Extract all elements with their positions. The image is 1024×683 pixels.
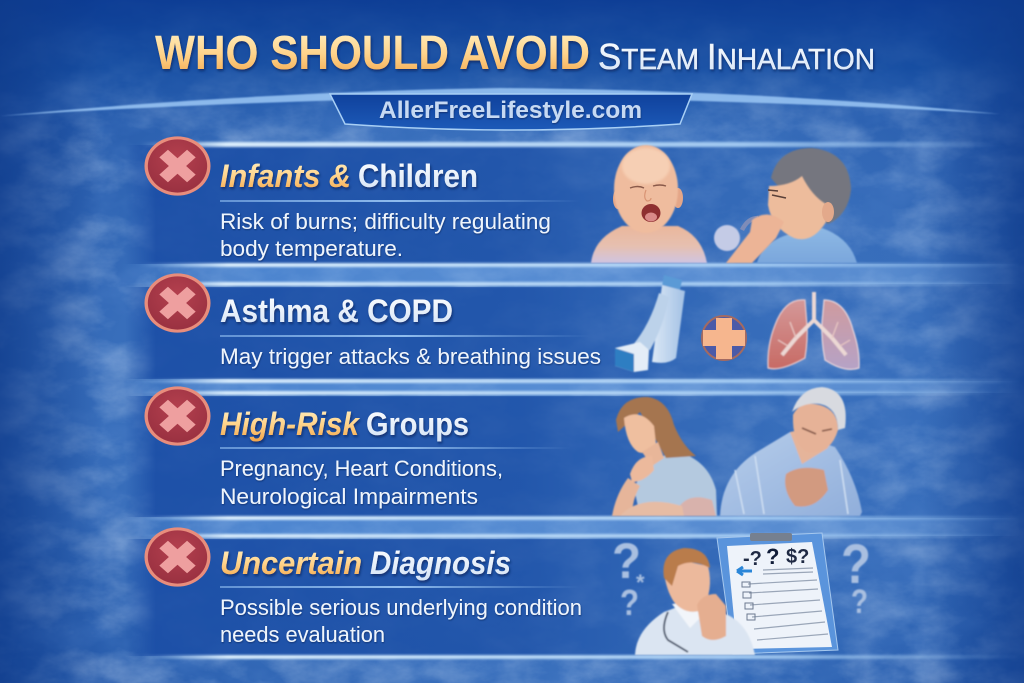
icon: red x <box>144 386 211 446</box>
icon: inhaler <box>615 275 685 372</box>
description <box>220 456 503 509</box>
illustration: clipboard: $? <box>786 546 809 568</box>
icon: question marks right <box>841 532 871 621</box>
heading: Infants & <box>220 158 351 194</box>
panel: infants and children <box>125 136 1020 267</box>
heading: Asthma & COPD <box>220 293 453 329</box>
heading: High-Risk <box>220 406 361 442</box>
heading <box>220 406 469 442</box>
description: Pregnancy, Heart Conditions, <box>220 456 503 481</box>
header arc <box>0 88 1000 116</box>
illustration: crying baby <box>591 145 707 263</box>
website badge: AllerFreeLifestyle.com <box>379 97 642 124</box>
heading: Uncertain <box>220 545 362 581</box>
heading <box>220 158 478 194</box>
illustration: boy with inhaler <box>714 148 857 263</box>
icon: question marks left: ? <box>620 582 639 623</box>
title: WHO SHOULD AVOID <box>155 27 590 80</box>
icon: red x <box>144 273 211 333</box>
description: Neurological Impairments <box>220 484 478 509</box>
icon: question marks right: ? <box>841 532 871 595</box>
description <box>220 595 582 647</box>
icon: red x <box>144 136 211 196</box>
icon: question marks right: ? <box>851 583 868 621</box>
icon: red x <box>144 527 211 587</box>
title <box>155 27 875 80</box>
panel: high-risk groups <box>125 386 1020 520</box>
icon: plus <box>702 316 746 360</box>
icon: question marks left: * <box>636 570 645 595</box>
illustration: doctor <box>635 548 755 655</box>
panel: uncertain diagnosis <box>125 527 1020 659</box>
heading: Children <box>358 158 478 194</box>
illustration: clipboard <box>717 533 838 654</box>
icon: question marks left <box>612 533 645 623</box>
heading: Groups <box>366 406 469 442</box>
description: Risk of burns; difficulty regulating <box>220 209 551 234</box>
panel: asthma and copd <box>125 273 1020 383</box>
description: body temperature. <box>220 236 403 261</box>
website badge <box>330 94 692 130</box>
heading <box>220 545 511 581</box>
illustration: pregnant woman <box>612 397 717 516</box>
description: May trigger attacks & breathing issues <box>220 344 601 369</box>
description <box>220 209 551 261</box>
illustration: man with chest pain <box>720 387 862 516</box>
illustration: clipboard: ? <box>766 544 779 569</box>
icon: question marks left: ? <box>612 533 641 589</box>
illustration: clipboard: -? <box>743 548 762 570</box>
light bands between rows <box>120 264 1020 536</box>
title: STEAM INHALATION <box>598 36 875 77</box>
heading: Diagnosis <box>370 545 511 581</box>
icon: lungs <box>768 292 859 369</box>
description: Possible serious underlying condition <box>220 595 582 620</box>
description: needs evaluation <box>220 622 385 647</box>
